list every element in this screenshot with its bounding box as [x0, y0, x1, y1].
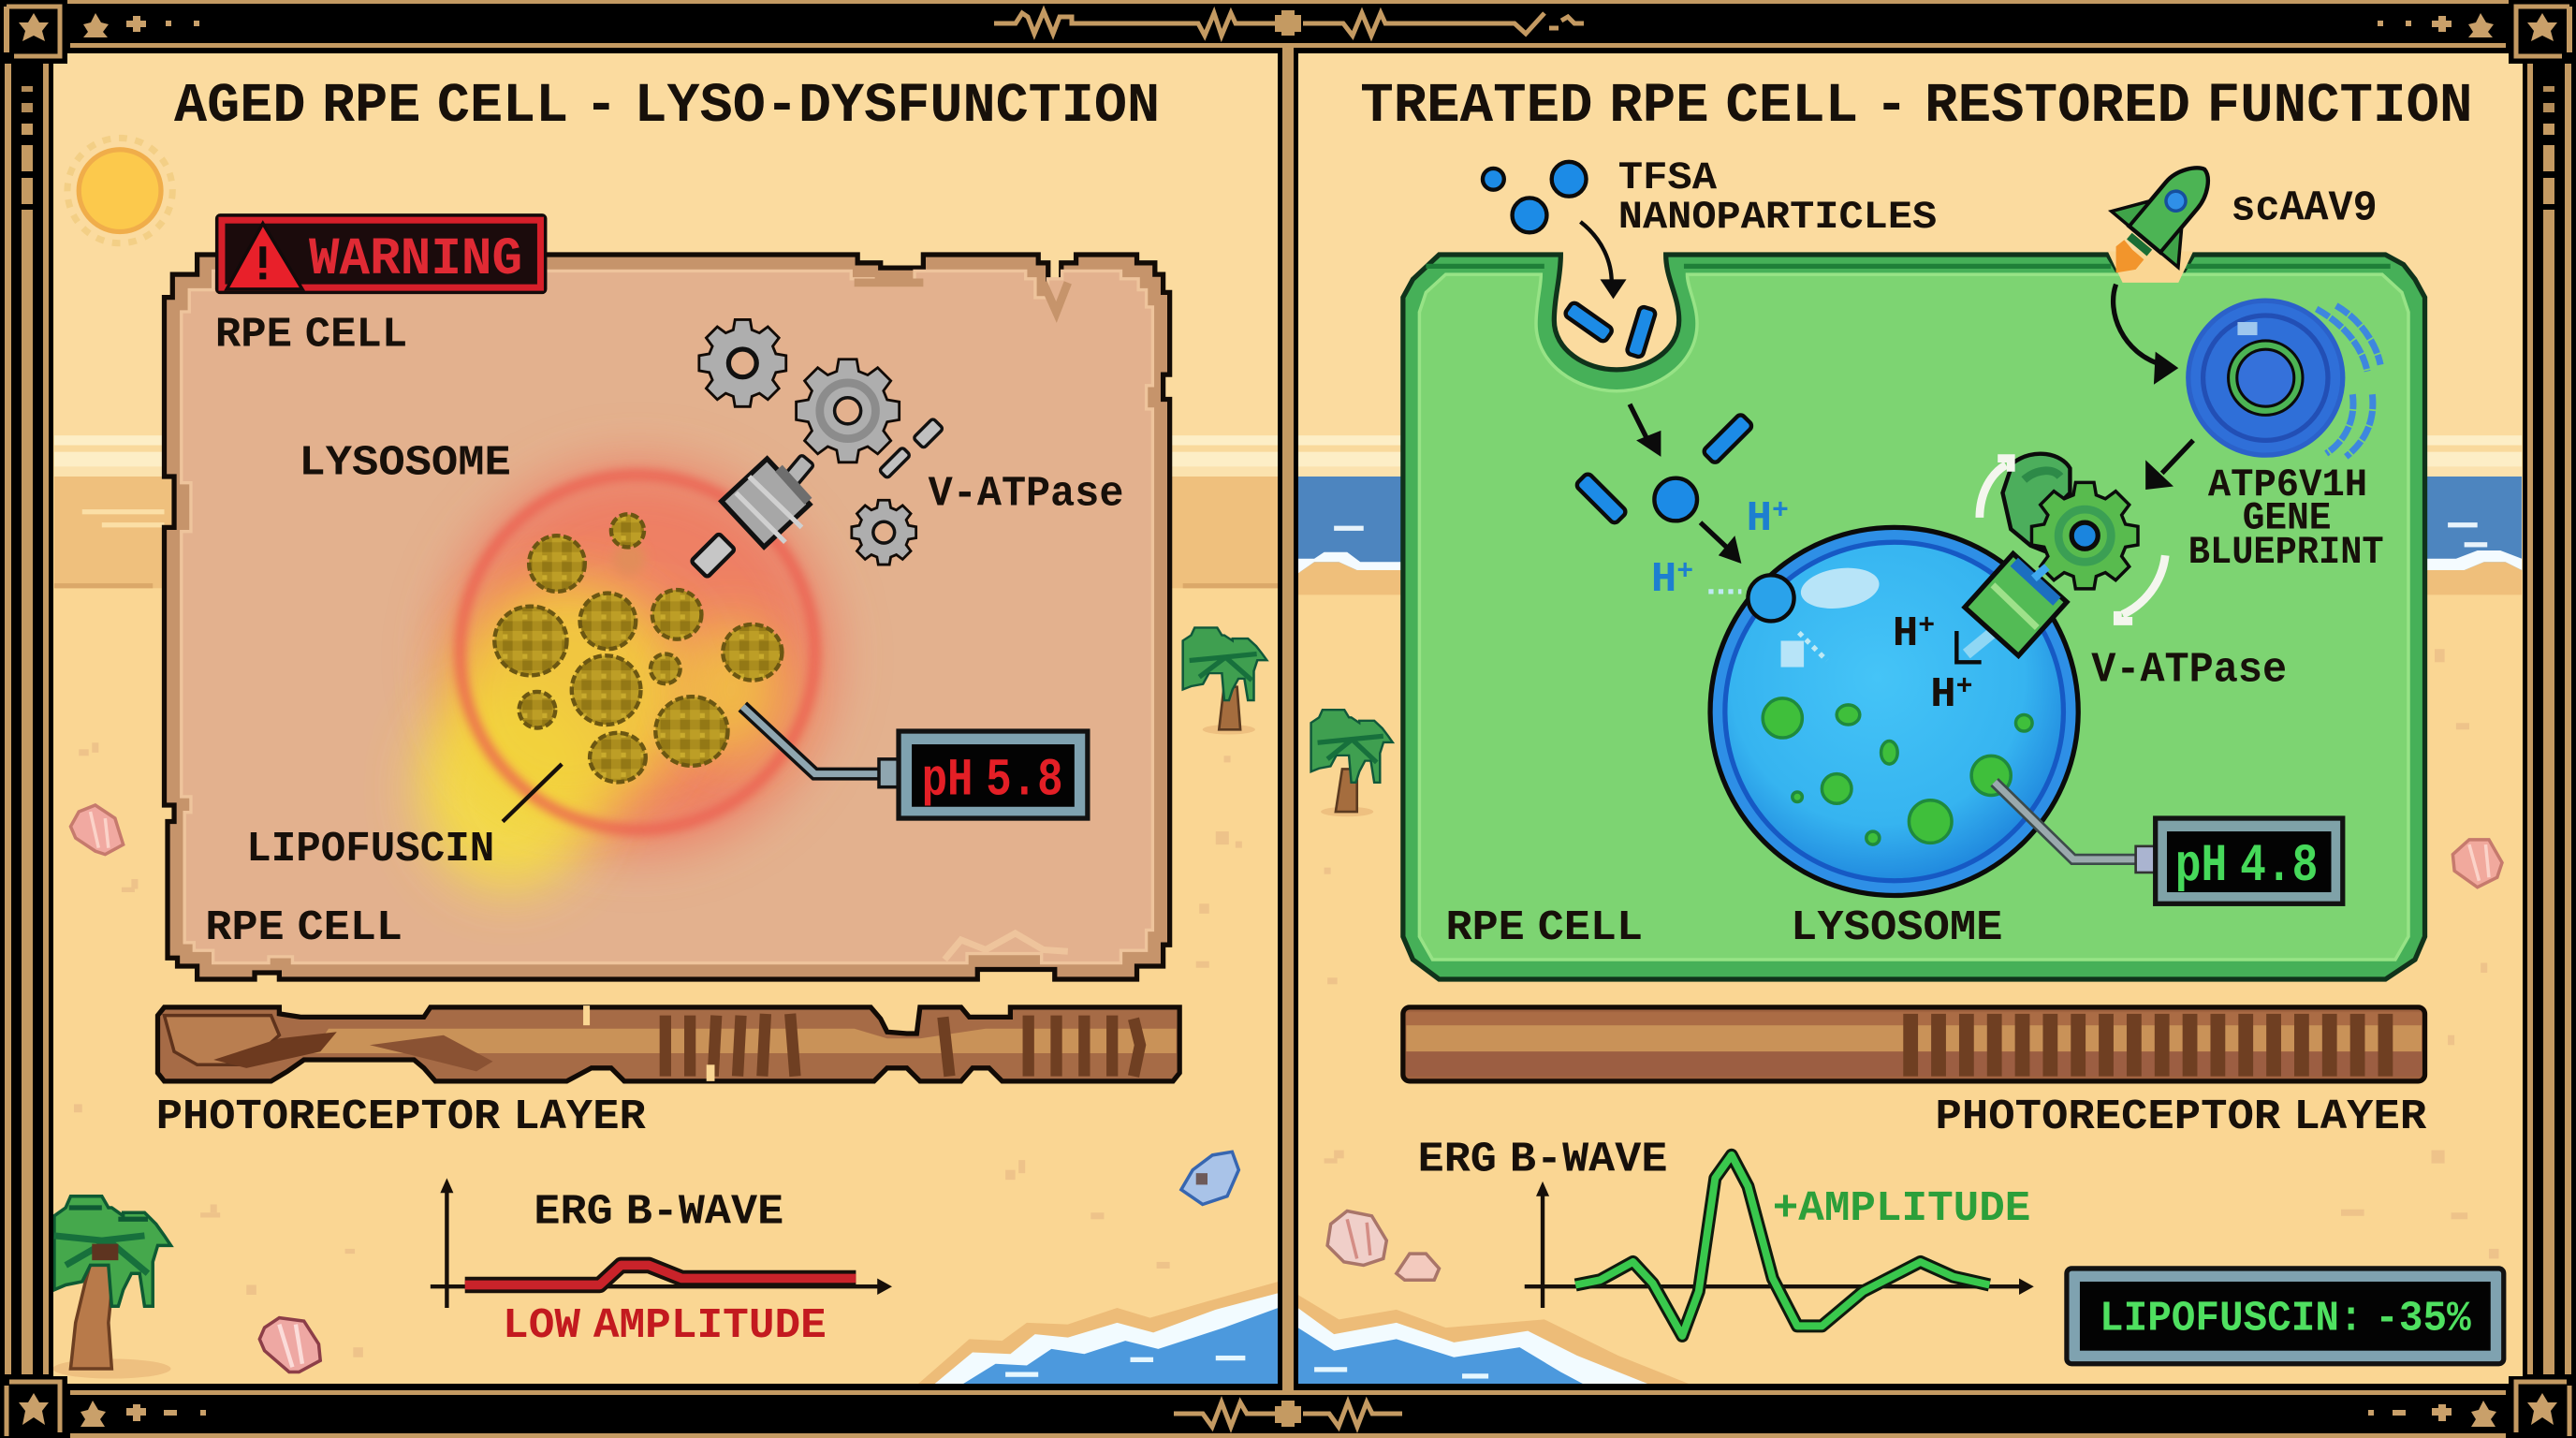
label: TFSA nanoparticles — [1618, 155, 1937, 240]
icon: rocket flame — [2116, 240, 2144, 272]
panel: treated RPE cell — [1360, 74, 2504, 1364]
sea: right panel bottom — [1298, 1295, 1692, 1386]
label: ATP6V1H gene blueprint: ATP6V1H — [2208, 462, 2367, 507]
icon: pink shell, right edge — [2452, 840, 2502, 888]
horizon: right panel with sea — [1298, 435, 2522, 594]
icon: V-ATPase restored — [1965, 553, 2067, 655]
label: RPE cell: RPE CELL — [1445, 903, 1643, 952]
title: treated: TREATED RPE CELL - RESTORED FUNCTION — [1360, 74, 2472, 138]
icon: pink shell — [259, 1318, 320, 1372]
arrow: nanoparticle to lysosome — [1701, 522, 1741, 564]
horizon: left panel — [54, 435, 1278, 588]
ornament: bottom ECG line — [1174, 1402, 1402, 1427]
chart axes — [431, 1178, 892, 1308]
meter probe highlight — [742, 707, 887, 774]
label: lysosome: LYSOSOME — [1791, 903, 2002, 952]
label: H+ inside lysosome: + — [1956, 671, 1973, 703]
sky band: left panel — [54, 52, 1278, 435]
proton labels: blue: + — [1772, 495, 1789, 527]
label: lysosome: LYSOSOME — [299, 438, 511, 487]
label: ATP6V1H gene blueprint — [2188, 462, 2384, 575]
readout: pH 5.8 — [879, 731, 1088, 818]
lipofuscin granules — [494, 514, 782, 782]
chart: restored ERG b-wave — [1418, 1136, 2034, 1336]
arrow: white rotation top — [1980, 459, 2011, 518]
nanorods in pit — [1564, 301, 1656, 358]
chart note: LOW AMPLITUDE — [503, 1301, 827, 1350]
chart trace: low amplitude outline — [465, 1265, 856, 1284]
icon: blue shell — [1181, 1152, 1238, 1204]
frame: left column — [0, 53, 53, 1384]
chart trace: low amplitude — [465, 1265, 856, 1284]
chart axes — [1525, 1181, 2034, 1308]
nanoparticle docking on membrane — [1708, 575, 1827, 661]
chart note: +AMPLITUDE — [1773, 1184, 2030, 1233]
chart: low ERG b-wave — [431, 1178, 892, 1350]
corner: bottom right — [2509, 1376, 2576, 1438]
label: TFSA nanoparticles: NANOPARTICLES — [1618, 195, 1937, 240]
icon: warning triangle — [227, 224, 302, 289]
corner: top left — [0, 0, 67, 64]
arrow: proton pumped in — [1956, 631, 1995, 662]
label: TFSA nanoparticles: TFSA — [1618, 155, 1718, 200]
released nanoparticles — [1575, 413, 1753, 524]
ornament: top left stars and dots — [83, 13, 199, 37]
photoreceptor layer: restored — [1403, 1007, 2425, 1081]
ornament: bottom centre diamond — [1275, 1401, 1301, 1427]
icon: broken gear 3 — [852, 500, 916, 565]
readout: pH 5.8: pH 5.8 — [922, 751, 1063, 811]
proton labels: blue — [1651, 494, 1789, 604]
readout: lipofuscin change — [2067, 1269, 2504, 1364]
icon: scAAV9 rocket — [2104, 140, 2237, 276]
label: scAAV9: scAAV9 — [2231, 183, 2378, 232]
sea: left panel bottom — [916, 1282, 1278, 1386]
aged cell body — [165, 255, 1170, 979]
lysosome: healthy — [1710, 527, 2078, 896]
readout: lipofuscin change: LIPOFUSCIN: -35% — [2100, 1295, 2471, 1343]
icon: restored gear — [2002, 454, 2138, 589]
meter probe: aged — [742, 707, 887, 774]
badge: warning — [217, 215, 546, 292]
icon: pink shell — [70, 805, 124, 855]
proton labels: blue: + — [1676, 556, 1693, 588]
chart title: ERG B-WAVE — [534, 1188, 783, 1237]
proton labels: blue: H — [1651, 555, 1676, 604]
treated cell body — [1403, 252, 2425, 979]
meter probe: treated — [1995, 782, 2144, 859]
meter probe highlight — [1995, 782, 2144, 859]
label: V-ATPase: V-ATPase — [929, 470, 1123, 519]
ornament: top centre diamond — [1275, 10, 1301, 36]
fragments: V-ATPase pieces — [879, 418, 944, 478]
icon: palm tree, right panel left edge — [1311, 710, 1393, 816]
lysosome: inflamed glow — [416, 435, 859, 890]
nanoparticles — [1483, 162, 1587, 232]
readout: pH 4.8: pH 4.8 — [2175, 836, 2318, 896]
label: RPE cell bottom: RPE CELL — [205, 903, 402, 952]
sky band: right panel — [1298, 52, 2522, 435]
label: warning: WARNING — [309, 229, 522, 289]
ornament: bottom right stars and dots — [2368, 1401, 2496, 1427]
chart title: ERG B-WAVE — [1418, 1136, 1667, 1184]
chart trace: outline — [1575, 1155, 1989, 1336]
label: photoreceptor right: PHOTORECEPTOR LAYER — [1936, 1093, 2427, 1141]
label: H+ inside lysosome: H — [1893, 609, 1918, 658]
arrow: pit to cytoplasm — [1630, 404, 1661, 457]
readout: pH 4.8 — [2136, 818, 2343, 903]
lysosome residual granules — [1763, 698, 2032, 844]
icon: palm tree, left panel right edge — [1183, 627, 1266, 735]
icon: palm tree, bottom left — [52, 1196, 171, 1379]
label: ATP6V1H gene blueprint: BLUEPRINT — [2188, 530, 2384, 575]
frame: right column — [2523, 53, 2576, 1384]
photoreceptor layer: damaged — [157, 1005, 1179, 1081]
icon: gene blueprint nucleus — [2188, 301, 2380, 457]
icon: sun — [67, 138, 172, 243]
label: H+ inside lysosome: H — [1930, 670, 1956, 719]
label: lipofuscin: LIPOFUSCIN — [246, 825, 494, 873]
ornament: bottom left stars and dots — [80, 1401, 206, 1427]
arrow: white rotation bottom — [2117, 555, 2165, 621]
arrow: into endocytic pit — [1580, 222, 1627, 299]
ornament: top right stars and dots — [2378, 13, 2494, 37]
corner: top right — [2509, 0, 2576, 64]
title: aged: AGED RPE CELL - LYSO-DYSFUNCTION — [174, 74, 1160, 138]
sand speckles — [74, 649, 2499, 1357]
label: ATP6V1H gene blueprint: GENE — [2243, 495, 2331, 540]
arrow: nucleus to gear — [2145, 440, 2193, 490]
icon: broken gear 2 — [797, 360, 900, 462]
chart trace: high amplitude — [1575, 1155, 1989, 1336]
label: RPE cell top: RPE CELL — [215, 310, 407, 359]
label: H+ inside lysosome: + — [1918, 610, 1935, 642]
icon: pink shell, right — [1327, 1211, 1386, 1265]
frame: centre divider — [1278, 48, 1298, 1390]
label: V-ATPase right: V-ATPase — [2091, 645, 2287, 694]
icon: damaged V-ATPase — [691, 454, 814, 578]
icon: broken gear 1 — [699, 319, 786, 406]
arrow: rocket to nucleus — [2114, 285, 2178, 385]
corner: bottom left — [0, 1376, 67, 1438]
leader line: lipofuscin — [503, 764, 562, 822]
label: photoreceptor left: PHOTORECEPTOR LAYER — [156, 1093, 646, 1141]
ornament: top ECG line — [994, 11, 1584, 36]
proton labels: blue: H — [1747, 494, 1772, 543]
icon: small shell — [1397, 1254, 1439, 1280]
panel: aged RPE cell — [156, 74, 1179, 1350]
